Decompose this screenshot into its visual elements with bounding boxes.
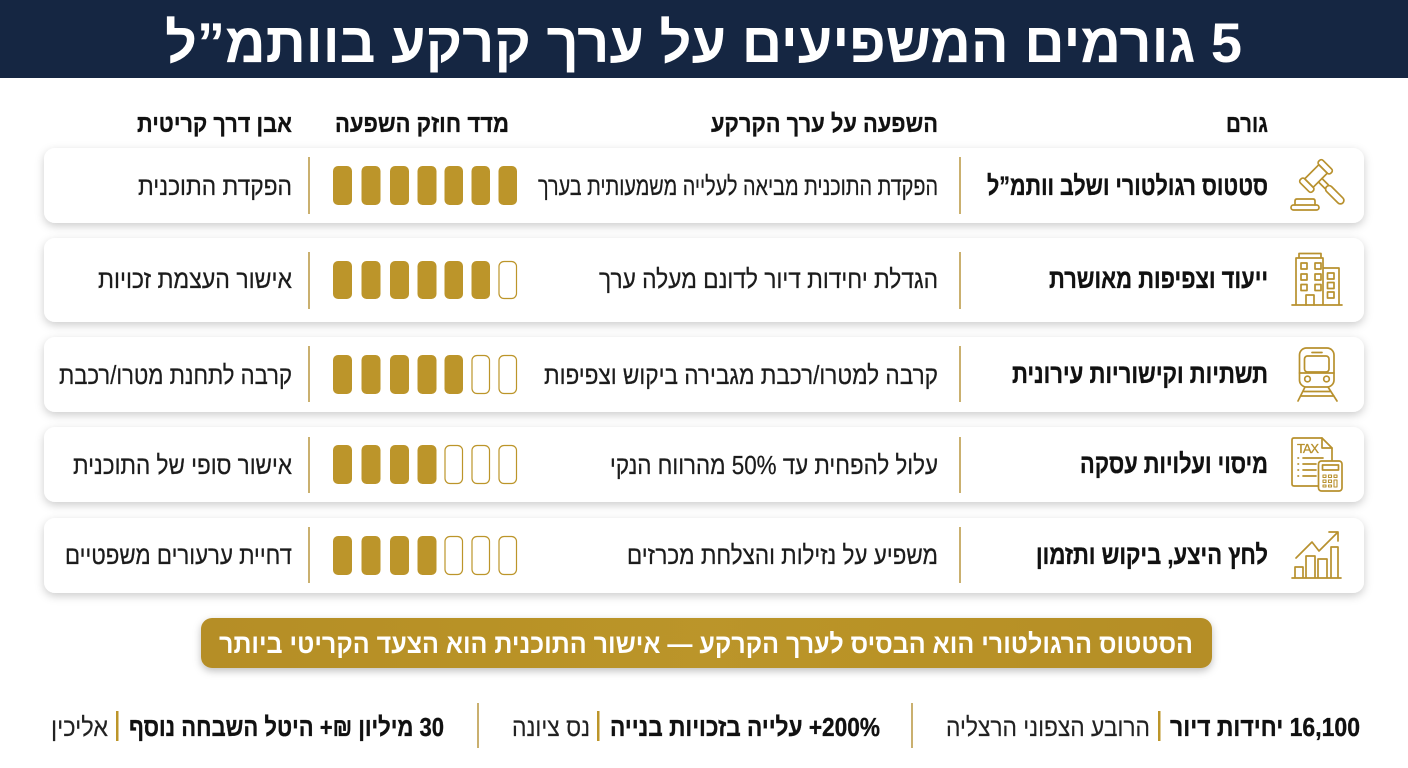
- strength meter 4 of 7: [333, 445, 516, 484]
- panel: row 5 execution pressure: [44, 518, 1364, 593]
- milestone: דחיית ערעורים משפטיים: [65, 540, 292, 570]
- strength meter 7 of 7: [333, 166, 517, 205]
- effect text: משפיע על נזילות והצלחת מכרזים: [627, 540, 938, 570]
- panel: row 4 taxation: [44, 427, 1364, 502]
- stat: Ness Ziona: נס ציונה: [512, 712, 590, 742]
- icon: train: [1298, 348, 1337, 401]
- panel: row 2 zoning and density: [44, 238, 1364, 322]
- milestone: אישור העצמת זכויות: [98, 264, 292, 294]
- strength meter 6 of 7: [333, 261, 516, 299]
- title band: [0, 0, 1408, 78]
- header: factor: גורם: [1226, 110, 1268, 138]
- banner text: הסטטוס הרגולטורי הוא הבסיס לערך הקרקע — אישור התוכנית הוא הצעד הקריטי ביותר: [219, 629, 1193, 659]
- strength meter 5 of 7: [333, 355, 516, 394]
- column headers: [137, 110, 1268, 138]
- header: critical milestone: אבן דרך קריטית: [137, 110, 292, 138]
- stat: Herzliya: [946, 711, 1360, 742]
- milestone: קרבה לתחנת מטרו/רכבת: [59, 360, 292, 390]
- panel: row 3 infrastructure: [44, 337, 1364, 412]
- effect text: עלול להפחית עד 50% מהרווח הנקי: [610, 450, 938, 480]
- factor name: ייעוד וצפיפות מאושרת: [1049, 264, 1268, 294]
- stat: Ness Ziona: [512, 711, 880, 742]
- factor name: תשתיות וקישוריות עירונית: [1012, 359, 1268, 389]
- stat: Elyakhin: 30 מיליון ₪+ היטל השבחה נוסף: [129, 712, 444, 742]
- header: impact strength index: מדד חוזק השפעה: [335, 110, 509, 138]
- effect text: הגדלת יחידות דיור לדונם מעלה ערך: [599, 264, 938, 294]
- icon: tax document and calculator: [1292, 438, 1342, 491]
- milestone: אישור סופי של התוכנית: [73, 450, 292, 480]
- factor name: מיסוי ועלויות עסקה: [1080, 449, 1268, 479]
- panel: row 1 regulatory status: [44, 148, 1364, 223]
- icon: tax document and calculator: TAX: [1297, 441, 1319, 456]
- icon: growth chart: [1292, 532, 1341, 578]
- factor name: סטטוס רגולטורי ושלב וותמ”ל: [987, 171, 1268, 201]
- milestone: הפקדת התוכנית: [138, 171, 292, 201]
- stat: Elyakhin: אליכין: [51, 712, 108, 742]
- header: effect on land value: השפעה על ערך הקרקע: [711, 110, 938, 138]
- icon: gavel: [1291, 159, 1354, 214]
- strength meter 4 of 7: [333, 536, 516, 575]
- effect text: הפקדת התוכנית מביאה לעלייה משמעותית בערך: [538, 171, 938, 201]
- icon: buildings: [1292, 254, 1342, 305]
- title: 5 גורמים המשפיעים על ערך קרקע בוותמ”ל: [165, 11, 1242, 74]
- stat: Herzliya: 16,100 יחידות דיור: [1170, 712, 1360, 742]
- effect text: קרבה למטרו/רכבת מגבירה ביקוש וצפיפות: [544, 360, 938, 390]
- stat: Herzliya: הרובע הצפוני הרצליה: [946, 712, 1150, 742]
- callout banner: [201, 618, 1212, 668]
- stat: Ness Ziona: ⁦+200%⁩ עלייה בזכויות בנייה: [610, 712, 880, 742]
- factor name: לחץ היצע, ביקוש ותזמון: [1036, 540, 1268, 570]
